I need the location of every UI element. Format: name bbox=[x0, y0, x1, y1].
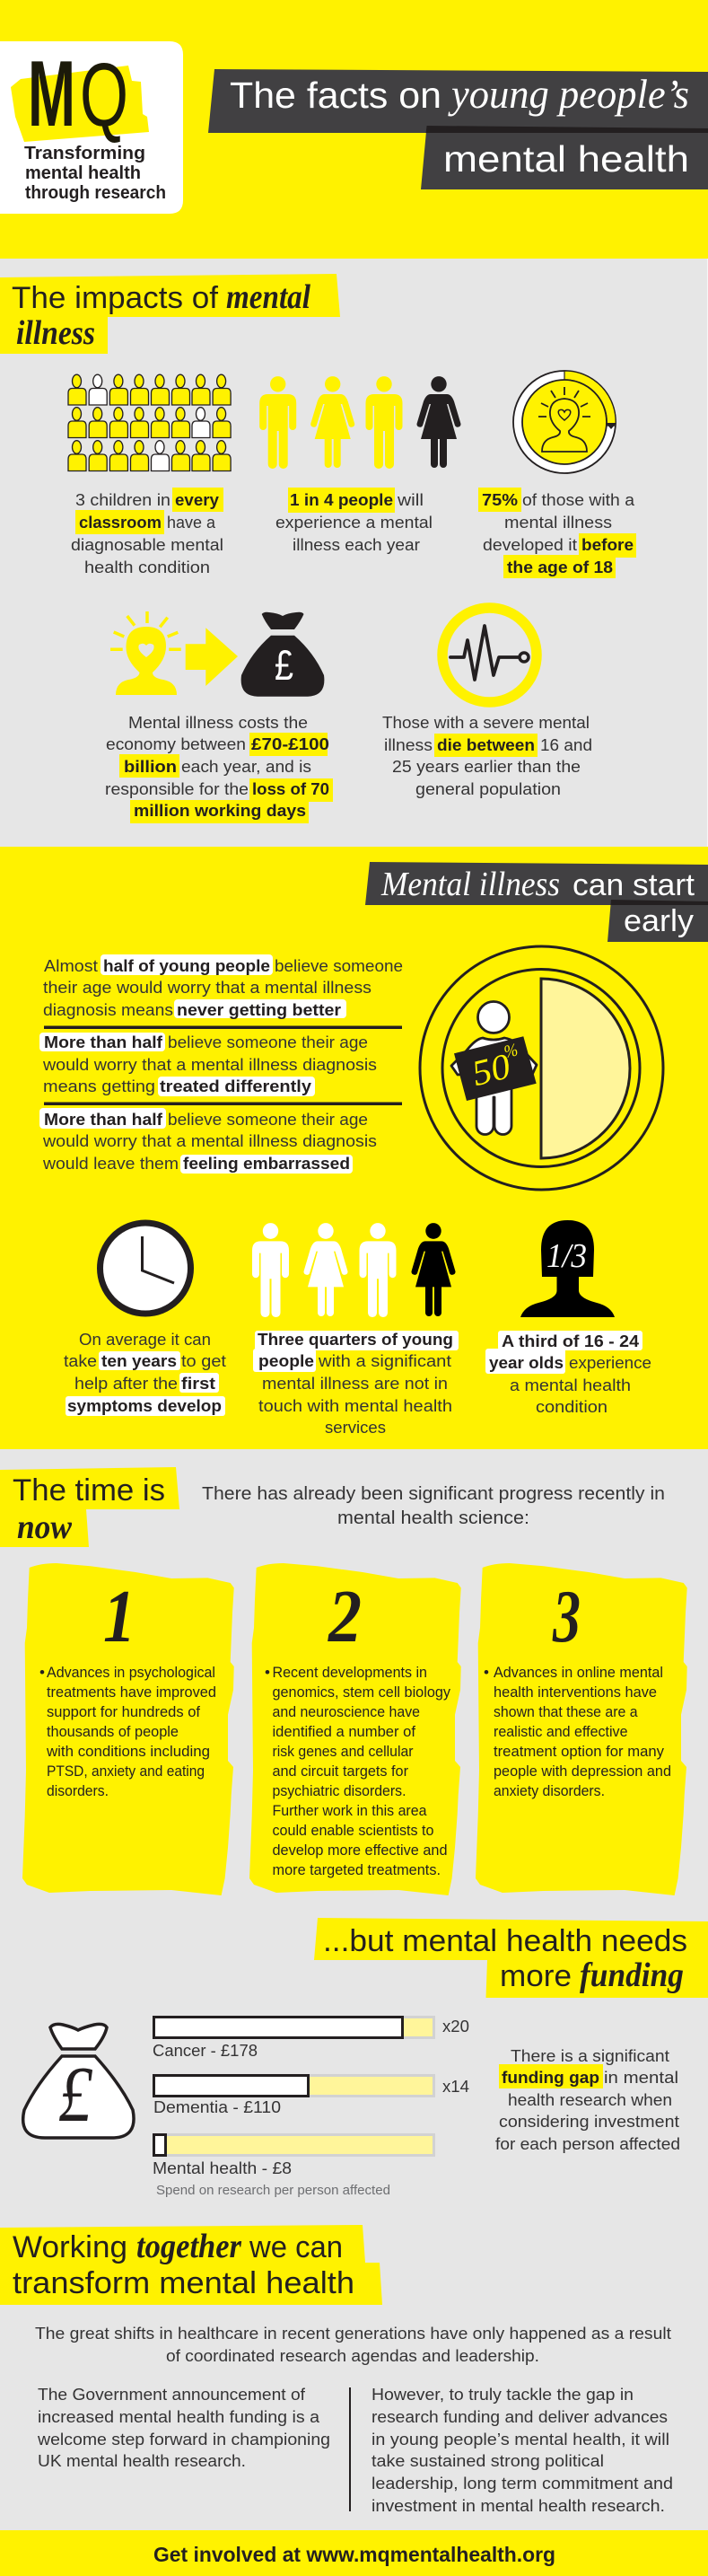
heading: the impacts of mental illness: mental bbox=[226, 278, 310, 316]
heading: working together: we can bbox=[249, 2230, 343, 2264]
icon: classroom of children bbox=[68, 374, 231, 470]
caption: economic cost: each year, and is bbox=[181, 758, 311, 776]
intro text: progress: There has already been significant progress recently in bbox=[202, 1484, 665, 1504]
chart: 50% circle with person bbox=[420, 946, 663, 1190]
bullet text bbox=[484, 1664, 671, 1799]
caption: three quarters: people bbox=[258, 1352, 314, 1370]
heading: but mental health needs more funding bbox=[314, 1918, 708, 1998]
bullet text: develop more effective and bbox=[273, 1842, 447, 1859]
bullet text: people with depression and bbox=[494, 1763, 671, 1780]
bullet text: treatment option for many bbox=[494, 1743, 664, 1760]
text block: however: in young people’s mental health, it will bbox=[371, 2431, 669, 2449]
statement: treated differently: means getting bbox=[43, 1077, 155, 1095]
statement: feeling embarrassed: believe someone their age bbox=[168, 1111, 368, 1129]
statement: treated differently: would worry that a mental illness diagnosis bbox=[42, 1056, 377, 1074]
icon: heartbeat circle bbox=[442, 608, 537, 702]
caption: ten years bbox=[64, 1331, 226, 1416]
person holding 50% sign bbox=[451, 1002, 537, 1135]
bullet text: Advances in online mental bbox=[494, 1664, 663, 1681]
icon: pound money bag: £ bbox=[275, 641, 293, 689]
logo letters MQ: M bbox=[28, 42, 75, 146]
caption: a third of 16-24 year olds bbox=[485, 1331, 651, 1416]
caption: 75% before the age of 18: before bbox=[581, 536, 634, 554]
bullet text: psychiatric disorders. bbox=[273, 1782, 406, 1799]
bullet text: health interventions have bbox=[494, 1684, 657, 1701]
caption: three quarters: services bbox=[325, 1419, 386, 1437]
caption: 1 in 4 people bbox=[275, 488, 433, 554]
heading: the time is now: The time is bbox=[13, 1473, 165, 1508]
heading: working together: transform mental health bbox=[13, 2266, 354, 2300]
main title: mental health bbox=[443, 138, 689, 180]
bar: dementia: Dementia - £110 bbox=[153, 2098, 281, 2116]
statement: feeling embarrassed: would worry that a mental illness diagnosis bbox=[42, 1132, 377, 1150]
statement: never getting better: never getting better bbox=[177, 1001, 341, 1019]
caption: economic cost: Mental illness costs the bbox=[128, 714, 308, 732]
bar: cancer: Cancer - £178 bbox=[153, 2042, 258, 2060]
heading: working together: together bbox=[136, 2228, 242, 2265]
bullet text: Advances in psychological bbox=[47, 1664, 215, 1681]
heading: mental illness can start early bbox=[365, 862, 708, 942]
bullet text: shown that these are a bbox=[494, 1703, 638, 1720]
intro text: progress bbox=[202, 1484, 665, 1528]
bullet text: PTSD, anxiety and eating bbox=[47, 1763, 205, 1780]
bullet text: • bbox=[39, 1664, 45, 1681]
caption: 3 children in every classroom: have a bbox=[167, 514, 216, 532]
statement: treated differently: believe someone their age bbox=[168, 1033, 368, 1051]
statement: never getting better bbox=[43, 954, 403, 1019]
callout: funding gap: There is a significant bbox=[511, 2047, 669, 2065]
caption: ten years: first bbox=[181, 1375, 215, 1393]
panel: progress 3 bbox=[476, 1563, 687, 1895]
caption: 3 children in every classroom: diagnosable mental bbox=[71, 536, 223, 554]
caption: ten years: On average it can bbox=[79, 1331, 211, 1349]
footer call to action: Get involved at www.mqmentalhealth.org bbox=[153, 2543, 555, 2566]
caption: 3 children in every classroom: every bbox=[175, 491, 219, 509]
logo tagline bbox=[24, 144, 166, 203]
text block: government announcement: increased mental health funding is a bbox=[38, 2408, 320, 2426]
heading: mental illness can start early: early bbox=[624, 904, 694, 938]
heading: the impacts of mental illness: The impacts of bbox=[12, 281, 219, 315]
callout: funding gap bbox=[495, 2047, 680, 2153]
icon: yellow head with rays bbox=[110, 611, 181, 695]
callout: funding gap: considering investment bbox=[499, 2113, 679, 2131]
text block: however: However, to truly tackle the gap in bbox=[371, 2386, 634, 2404]
statement: feeling embarrassed bbox=[39, 1108, 377, 1174]
icon: white money bag: £ bbox=[58, 2052, 93, 2139]
bullet text: realistic and effective bbox=[494, 1723, 628, 1740]
icon: 75% dial with head bbox=[513, 371, 616, 473]
bullet text: and neuroscience have bbox=[273, 1703, 420, 1720]
caption: ten years: to get bbox=[181, 1352, 226, 1370]
text block: however: leadership, long term commitment and bbox=[371, 2475, 673, 2492]
logo tagline: through research bbox=[25, 183, 166, 203]
main title: young people’s bbox=[448, 71, 689, 117]
bullet text: identified a number of bbox=[273, 1723, 415, 1740]
statement: never getting better: their age would worry that a mental illness bbox=[43, 979, 371, 997]
caption: die earlier bbox=[382, 714, 592, 798]
number 3: 3 bbox=[552, 1575, 581, 1658]
statement: treated differently: More than half bbox=[44, 1033, 163, 1051]
bullet text: anxiety disorders. bbox=[494, 1782, 605, 1799]
caption: die earlier: illness bbox=[384, 736, 433, 754]
heading: but mental health needs more funding: funding bbox=[580, 1956, 684, 1994]
text block: government announcement: The Government announcement of bbox=[38, 2386, 306, 2404]
statement: never getting better: half of young people bbox=[103, 957, 270, 975]
arrow bbox=[186, 628, 238, 686]
callout: funding gap: funding gap bbox=[502, 2069, 599, 2087]
number 2: 2 bbox=[327, 1575, 362, 1658]
caption: economic cost: responsible for the bbox=[105, 780, 249, 798]
caption: 3 children in every classroom: 3 children in bbox=[75, 491, 170, 509]
bar: dementia bbox=[153, 2076, 469, 2116]
text block: government announcement: welcome step forward in championing bbox=[37, 2431, 330, 2449]
heading: but mental health needs more funding: ...but mental health needs bbox=[323, 1924, 687, 1958]
text block: however: investment in mental health research. bbox=[371, 2497, 665, 2515]
bar: mental health: Mental health - £8 bbox=[153, 2159, 292, 2177]
caption: ten years: help after the bbox=[74, 1375, 178, 1393]
bullet text: and circuit targets for bbox=[273, 1763, 408, 1780]
text block: however bbox=[371, 2386, 673, 2515]
caption: 75% before the age of 18: of those with a bbox=[522, 491, 635, 509]
statement: treated differently bbox=[39, 1033, 377, 1096]
caption: ten years: symptoms develop bbox=[67, 1397, 222, 1415]
caption: die earlier: die between bbox=[437, 736, 535, 754]
caption: ten years: ten years bbox=[101, 1352, 177, 1370]
person holding 50% sign: % bbox=[502, 1040, 520, 1062]
panel: progress 2 bbox=[249, 1563, 461, 1895]
bullet text: treatments have improved bbox=[47, 1684, 216, 1701]
bar: cancer: x20 bbox=[442, 2018, 469, 2035]
caption: economic cost: billion bbox=[124, 758, 177, 776]
bullet text: • bbox=[484, 1664, 489, 1681]
bullet text: thousands of people bbox=[47, 1723, 179, 1740]
heading: the impacts of mental illness bbox=[0, 274, 340, 354]
statement: feeling embarrassed: More than half bbox=[44, 1111, 163, 1129]
bullet text bbox=[265, 1664, 450, 1878]
heading: mental illness can start early: Mental illness bbox=[380, 866, 560, 903]
statement: never getting better: diagnosis means bbox=[43, 1001, 173, 1019]
icon: three quarters of young people bbox=[252, 1223, 456, 1317]
text block: government announcement bbox=[37, 2386, 330, 2470]
statement: treated differently: treated differently bbox=[160, 1077, 311, 1095]
caption: a third of 16-24 year olds: a mental health bbox=[510, 1376, 631, 1394]
chart note: Spend on research per person affected bbox=[156, 2183, 390, 2198]
text block: great shifts: The great shifts in healthcare in recent generations have only happened as a result bbox=[35, 2325, 671, 2343]
caption: three quarters: mental illness are not in bbox=[262, 1375, 448, 1393]
statement: never getting better: believe someone bbox=[275, 957, 403, 975]
callout: funding gap: health research when bbox=[508, 2091, 672, 2109]
caption: 75% before the age of 18: 75% bbox=[482, 491, 518, 509]
heading: the time is now: now bbox=[17, 1508, 73, 1546]
caption: die earlier: 16 and bbox=[540, 736, 592, 754]
caption: a third of 16-24 year olds: year olds bbox=[489, 1354, 564, 1372]
caption: 1 in 4 people: 1 in 4 people bbox=[290, 491, 393, 509]
main title bbox=[208, 69, 708, 189]
icon: white money bag bbox=[23, 2024, 134, 2139]
icon: pound money bag bbox=[241, 612, 324, 697]
icon: silhouette one third: 1/3 bbox=[546, 1237, 587, 1275]
caption: 3 children in every classroom: health condition bbox=[84, 558, 210, 576]
caption: die earlier: general population bbox=[415, 780, 561, 798]
caption: economic cost: loss of 70 bbox=[252, 780, 329, 798]
icon: silhouette one third bbox=[520, 1220, 615, 1317]
caption: three quarters bbox=[253, 1331, 459, 1437]
caption: die earlier: Those with a severe mental bbox=[382, 714, 590, 732]
text block: great shifts bbox=[35, 2325, 671, 2365]
caption: 1 in 4 people: will bbox=[397, 491, 424, 509]
statement: feeling embarrassed: would leave them bbox=[42, 1155, 179, 1173]
statement: never getting better: Almost bbox=[44, 957, 98, 975]
caption: three quarters: Three quarters of young bbox=[258, 1331, 453, 1349]
panel: progress 1 bbox=[22, 1563, 234, 1895]
heading: the impacts of mental illness: illness bbox=[16, 314, 95, 352]
bar: dementia: x14 bbox=[442, 2078, 469, 2096]
caption: three quarters: with a significant bbox=[318, 1352, 451, 1370]
heading: working together bbox=[0, 2225, 382, 2305]
caption: 75% before the age of 18 bbox=[478, 488, 636, 578]
bullet text: more targeted treatments. bbox=[273, 1861, 441, 1878]
bar: mental health bbox=[153, 2135, 434, 2177]
text block: great shifts: of coordinated research agendas and leadership. bbox=[166, 2347, 539, 2365]
bullet text: Recent developments in bbox=[273, 1664, 427, 1681]
bar: cancer bbox=[153, 2017, 469, 2060]
caption: economic cost: £70-£100 bbox=[251, 735, 329, 753]
main title: The facts on bbox=[230, 75, 441, 116]
caption: 75% before the age of 18: the age of 18 bbox=[507, 558, 613, 576]
bullet text: with conditions including bbox=[46, 1743, 210, 1760]
caption: a third of 16-24 year olds: experience bbox=[569, 1354, 651, 1372]
caption: economic cost: economy between bbox=[106, 735, 246, 753]
statement: feeling embarrassed: feeling embarrassed bbox=[183, 1155, 350, 1173]
icon: 1 in 4 people bbox=[259, 376, 461, 469]
caption: 75% before the age of 18: mental illness bbox=[504, 514, 612, 532]
caption: economic cost bbox=[105, 714, 333, 823]
caption: ten years: take bbox=[64, 1352, 97, 1370]
caption: a third of 16-24 year olds: A third of 16 - 24 bbox=[502, 1332, 639, 1350]
heading: but mental health needs more funding: more bbox=[500, 1959, 572, 1993]
callout: funding gap: for each person affected bbox=[495, 2135, 680, 2153]
callout: funding gap: in mental bbox=[604, 2069, 678, 2087]
logo brush stroke bbox=[11, 66, 149, 142]
caption: 3 children in every classroom bbox=[71, 488, 223, 576]
intro text: progress: mental health science: bbox=[337, 1508, 529, 1528]
bullet text: • bbox=[265, 1664, 270, 1681]
text block: however: research funding and deliver advances bbox=[371, 2408, 668, 2426]
heading: working together: Working bbox=[13, 2230, 127, 2264]
caption: a third of 16-24 year olds: condition bbox=[536, 1398, 607, 1416]
icon: clock bbox=[101, 1223, 190, 1314]
heading: the time is now bbox=[0, 1467, 179, 1547]
text block: young people's worries bbox=[39, 954, 403, 1174]
logo card bbox=[0, 41, 183, 214]
bullet text: Further work in this area bbox=[273, 1802, 427, 1819]
bar chart: research spend bbox=[153, 2017, 469, 2198]
caption: 75% before the age of 18: developed it bbox=[483, 536, 577, 554]
bullet text: support for hundreds of bbox=[47, 1703, 200, 1720]
heading: mental illness can start early: can start bbox=[573, 868, 695, 902]
logo tagline: mental health bbox=[25, 163, 141, 183]
caption: economic cost: million working days bbox=[134, 802, 306, 820]
bullet text: genomics, stem cell biology bbox=[273, 1684, 450, 1701]
bullet text: disorders. bbox=[47, 1782, 109, 1799]
text block: however: take sustained strong political bbox=[371, 2452, 604, 2470]
caption: 3 children in every classroom: classroom bbox=[79, 514, 162, 532]
bullet text: risk genes and cellular bbox=[273, 1743, 414, 1760]
person holding 50% sign: 50 bbox=[468, 1045, 514, 1094]
caption: die earlier: 25 years earlier than the bbox=[392, 758, 581, 776]
bullet text bbox=[39, 1664, 216, 1799]
caption: 1 in 4 people: experience a mental bbox=[275, 514, 433, 532]
caption: three quarters: touch with mental health bbox=[258, 1397, 452, 1415]
text block: government announcement: UK mental health research. bbox=[38, 2452, 246, 2470]
bullet text: could enable scientists to bbox=[273, 1822, 434, 1839]
caption: 1 in 4 people: illness each year bbox=[293, 536, 420, 554]
logo tagline: Transforming bbox=[24, 144, 145, 163]
logo letters MQ: Q bbox=[80, 45, 128, 145]
number 1: 1 bbox=[103, 1575, 135, 1658]
